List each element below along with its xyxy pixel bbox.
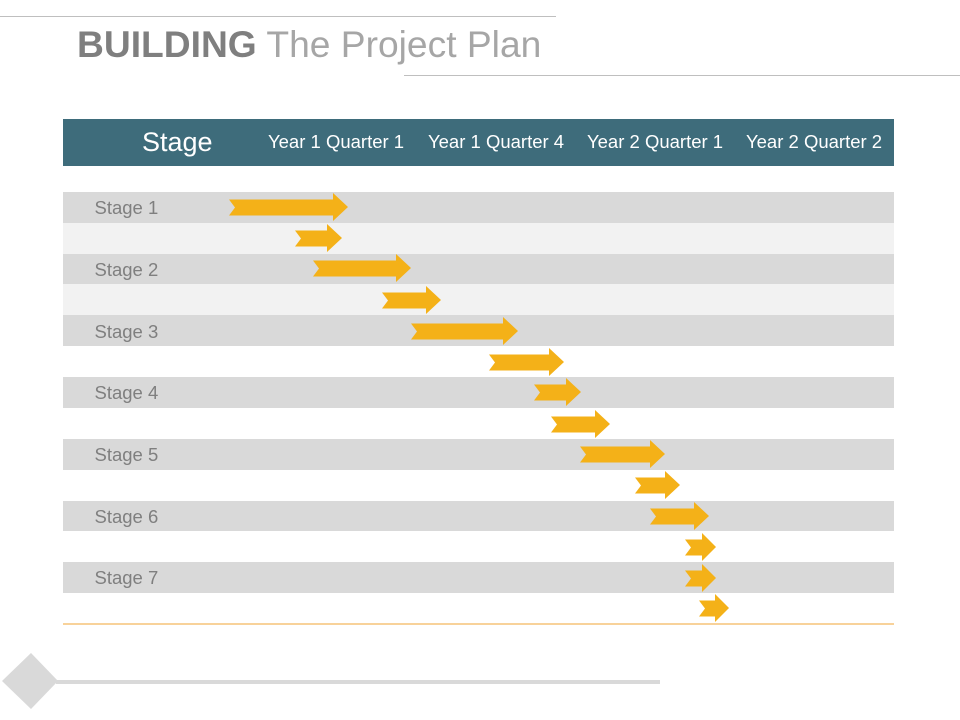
row: stage 1 <box>63 192 894 223</box>
label: stage 2: Stage 2 <box>94 258 158 280</box>
header: stage: Stage <box>142 127 213 157</box>
footer diamond <box>2 653 57 709</box>
label: stage 7: Stage 7 <box>94 566 158 588</box>
header: year 2 quarter 1: Year 2 Quarter 1 <box>587 131 723 152</box>
row: stage 4 <box>63 377 894 408</box>
row: stage 2 <box>63 254 894 284</box>
label: stage 5: Stage 5 <box>94 444 158 464</box>
label: stage 6: Stage 6 <box>94 506 158 526</box>
label: stage 1: Stage 1 <box>94 196 158 218</box>
table bottom line <box>63 623 894 625</box>
header: year 1 quarter 4: Year 1 Quarter 4 <box>428 131 564 152</box>
footer line <box>56 680 660 684</box>
header: year 1 quarter 1: Year 1 Quarter 1 <box>268 131 404 152</box>
row: stage 3 <box>63 315 894 346</box>
row: stage 6 <box>63 501 894 531</box>
title: BUILDING The Project Plan <box>77 23 541 65</box>
row: stage 7 <box>63 562 894 593</box>
label: stage 3: Stage 3 <box>94 320 158 342</box>
row: stage 5 <box>63 439 894 470</box>
header: year 2 quarter 2: Year 2 Quarter 2 <box>746 131 882 152</box>
label: stage 4: Stage 4 <box>94 382 158 402</box>
table header <box>63 119 894 166</box>
